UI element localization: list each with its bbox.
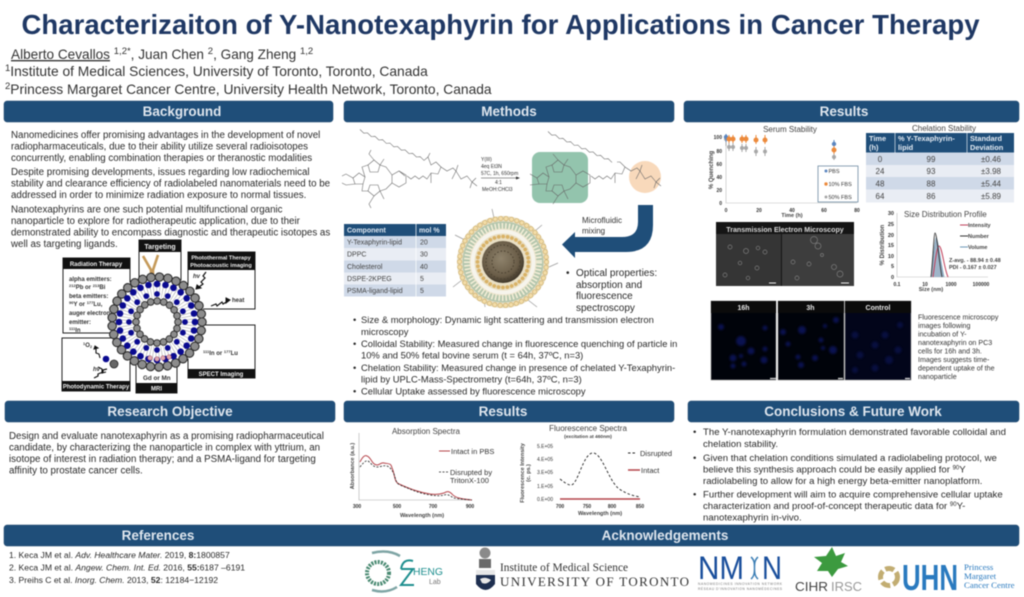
logo: NMIN: RÉSEAU D'INNOVATION NANOMÉDECINES [698,586,783,591]
box: radiation therapy: beta emitters: [69,294,108,300]
conclusions list: characterization and proof-of-concept therapeutic data for [703,501,947,512]
logo: NMIN: NM [698,550,744,586]
methods bullet list: Colloidal Stability: Measured change in fluorescence quenching of particle in [361,338,677,349]
chart: size distribution profile: 10 [888,254,894,260]
chart: fluorescence spectra: Fluorescence Spectra [549,424,627,433]
logo: University of Toronto [476,548,689,590]
logo: UHN Princess Margaret: Cancer Centre [964,580,1015,590]
heading: references and acknowledgements bar: Acknowledgements [602,528,728,543]
title: Characterizaiton of Y-Nanotexaphyrin for Applications in Cancer Therapy [22,9,980,40]
box: targeting: Targeting [144,244,176,251]
logo: University of Toronto: UNIVERSITY OF TORONTO [500,574,689,589]
image: transmission electron microscopy: Transmission Electron Microscopy [726,226,844,234]
chart: fluorescence spectra: Fluorescence Intensity [520,442,526,503]
box: radiation therapy: alpha emitters: [69,277,112,283]
image: fluorescence microscopy panels: Control [866,305,890,312]
optical properties bullet: Optical properties: [576,268,657,279]
heading: background [4,101,333,122]
chart: serum stability: 40 [789,208,795,214]
table: chelation stability: ±5.89 [981,192,1002,201]
references list: 2. Keca JM et al. Angew. Chem. Int. Ed. 2016, 55:6187 –6191 [9,562,245,572]
logo: Zheng Lab: HENG [413,566,443,578]
chart: fluorescence spectra: Intact [641,466,660,475]
authors: 1,2* [114,46,131,57]
box: radiation therapy [63,258,130,334]
reaction conditions: MeOH:CHCl3 [482,187,513,193]
chart: absorption spectra: TritonX-100 [450,476,489,485]
chemical structure: Y-texaphyrin lipid [530,132,661,204]
affiliations: 2 [5,81,10,92]
arrow: microfluidic mixing [562,205,653,258]
background text: radiopharmaceuticals, due to their ability utilize several radioisotopes [11,142,308,152]
image: fluorescence microscopy panels [711,301,911,380]
logo: CIHR IRSC [795,547,862,594]
label: microfluidic mixing: mixing [582,226,605,236]
table: chelation stability: 0 [878,155,883,164]
reaction conditions: 4:1 [495,180,502,186]
chart: absorption spectra: 300 [353,504,361,510]
table: chelation stability: % Y-Texaphyrin- [898,134,955,143]
box: SPECT imaging: 111 [203,349,210,354]
fluorescence microscopy caption [918,314,999,381]
chart: size distribution profile: % Distribution [880,224,886,265]
chart: size distribution profile: 25 [888,222,894,228]
table: lipid composition: mol % [419,228,440,234]
icon: head group highlight [629,161,661,193]
box: radiation therapy: auger electron [69,311,111,317]
table: chelation stability: ±0.46 [981,155,1002,164]
chart: fluorescence spectra: 750 [583,504,591,510]
table: lipid composition: Cholesterol [347,264,383,271]
diagram: multifunctional nanotexaphyrin [62,240,255,393]
heading: conclusions [688,401,1019,422]
chart: serum stability: 60 [821,208,827,214]
box: photothermal: heat [232,298,244,304]
chart: fluorescence spectra: (excitation at 460nm) [564,434,612,440]
chart: size distribution profile: 100000 [973,282,990,288]
box: SPECT imaging [188,325,255,378]
conclusions list: Y- [957,501,965,512]
table: lipid composition: DPPC [347,252,366,258]
authors: 2 [208,46,213,57]
chart: size distribution profile: 0 [891,275,894,281]
methods bullet list: • [353,386,356,396]
box: photodynamic therapy: Photodynamic Therapy [63,384,130,390]
chart: serum stability: 20 [756,208,762,214]
table: chelation stability: (h) [869,143,879,152]
chart: size distribution profile [880,210,1001,293]
nanoparticle illustration [453,209,558,308]
chart: fluorescence spectra: 5.E+05 [537,444,553,450]
box: SPECT imaging: 177 [224,349,231,354]
table: chelation stability: 24 [876,167,885,176]
research objective text: isotope of interest in radiation therapy; and a PSMA-ligand for targeting [9,454,316,465]
chart: serum stability [709,125,860,219]
box: MRI: Gd or Mn [143,375,171,382]
conclusions list: • [693,427,696,438]
background text: Despite promising developments, issues regarding low radiochemical [11,167,310,178]
authors: Alberto Cevallos [11,47,110,62]
table: chelation stability: 99 [927,155,936,164]
authors: 1,2 [300,46,313,57]
table: lipid composition: DSPE-2KPEG [347,276,392,283]
chart: absorption spectra: 700 [429,504,437,510]
conclusions list: • [693,490,696,500]
logo: CIHR IRSC: CIHR [795,579,828,594]
chart: size distribution profile: PDI - 0.167 ± 0.027 [949,265,997,271]
methods bullet list: • [353,362,356,373]
box: photothermal: Photoacoustic imaging [190,263,252,269]
chart: size distribution profile: Volume [968,245,987,251]
conclusions list: radiolabeling to allow for a high energy beta-emitter nanoplatform. [703,476,982,487]
box: radiation therapy: emitter: [69,320,91,326]
background text: addressed in order to minimize radiation exposure to normal tissues. [11,190,306,201]
methods bullet list: • [353,338,356,349]
chart: serum stability: 100 [714,135,722,141]
chart: size distribution profile: 10 [922,282,928,288]
image: fluorescence microscopy panels: 3h [806,305,815,312]
logo: NMIN: N [762,550,782,586]
reaction conditions: 57C, 1h, 650rpm [481,171,518,177]
methods bullet list: microscopy [361,326,409,337]
chemical structure: texaphyrin lipid [342,130,477,208]
logo: UHN Princess Margaret [880,557,1015,597]
conclusions list: Further development will aim to acquire comprehensive cellular uptake [703,490,1003,500]
affiliations: Institute of Medical Sciences, University of Toronto, Toronto, Canada [10,64,428,79]
table: lipid composition: PSMA-ligand-lipid [347,288,403,295]
background text: Nanomedicines offer promising advantages in the development of novel [11,130,320,141]
table: lipid composition: 30 [420,252,428,258]
table: chelation stability [866,124,1014,202]
reaction conditions: Y(III) [481,157,492,163]
fluorescence microscopy caption: Fluorescence microscopy [918,314,999,322]
conclusions list: 90 [950,502,957,508]
table: chelation stability: lipid [898,143,914,152]
references list: 1. Keca JM et al. Adv. Healthcare Mater. 2019, 8:1800857 [9,550,230,560]
optical properties bullet [566,268,657,314]
chart: absorption spectra: Intact in PBS [451,447,494,456]
methods bullet list: Chelation Stability: Measured change in presence of chelated Y-Texaphyrin- [361,362,675,373]
heading: references and acknowledgements bar [4,525,1019,546]
image: fluorescence microscopy panels: 16h [737,305,750,312]
chart: absorption spectra: 500 [393,504,401,510]
table: chelation stability: Deviation [970,143,1004,152]
box: photodynamic therapy [62,338,130,391]
table: chelation stability: Chelation Stability [912,124,976,133]
box: photodynamic therapy: O [85,343,90,349]
logo: UHN Princess Margaret: Princess [964,562,994,572]
reaction conditions: 4eq Et3N [481,164,502,170]
chart: fluorescence spectra: 850 [636,504,644,510]
authors: , Juan Chen [131,47,208,62]
chart: absorption spectra: Absorbance (a.u.) [350,443,356,489]
label: microfluidic mixing: Microfluidic [582,216,622,225]
chart: serum stability: % Quenching [709,151,715,189]
chart: absorption spectra: Wavelength (nm) [400,513,444,519]
chart: fluorescence spectra: Wavelength (nm) [578,511,622,517]
conclusions list: nanotexaphyrin in-vivo. [703,512,802,524]
research objective text: affinity to prostate cancer cells. [9,466,143,476]
box: radiation therapy: 213 [93,283,100,288]
methods bullet list [353,314,677,396]
background text: concurrently, enabling combination therapies or theranostic modalities [11,153,312,164]
heading: references and acknowledgements bar: References [122,528,194,543]
heading: conclusions: Conclusions & Future Work [764,404,942,419]
methods bullet list: 10% and 50% fetal bovine serum (t = 64h, 37ºC, n=3) [361,350,583,360]
heading: research objective [5,401,335,422]
logo: University of Toronto: Institute of Medical Science [500,562,628,574]
fluorescence microscopy caption: dependent uptake of the [918,364,995,372]
research objective text: Design and evaluate nanotexaphyrin as a promising radiopharmaceutical [9,431,324,442]
references list [9,550,245,585]
chart: serum stability: 20 [716,188,722,194]
logo: Zheng Lab: Lab [429,579,441,586]
conclusions list: Given that chelation conditions simulated a radiolabeling protocol, we [703,453,997,464]
heading: results top: Results [820,104,868,119]
background text: Nanotexaphyrins are one such potential multifunctional organic [11,204,283,216]
chart: serum stability: Time (h) [781,213,803,219]
logo: CIHR IRSC: IRSC [831,579,862,594]
conclusions list: Y [959,464,966,476]
table: chelation stability: 64 [876,192,885,201]
research objective text: candidate, by characterizing the nanoparticle in complex with yttrium, an [9,442,320,454]
background text [10,130,330,250]
fluorescence microscopy caption: nanoparticle [918,373,957,381]
methods bullet list: lipid by UPLC-Mass-Spectrometry (t=64h, 37ºC, n=3) [361,374,582,384]
table: chelation stability: 88 [927,180,936,188]
chart: serum stability: 80 [854,208,860,214]
chart: absorption spectra: Disrupted by [450,468,492,477]
legend: serum stability: 10% FBS [828,182,852,188]
table: chelation stability: 48 [876,180,885,188]
fluorescence microscopy caption: Images suggests time- [918,356,990,364]
chart: absorption spectra: 900 [466,504,474,510]
box: photodynamic therapy: 1 [83,341,86,346]
box: SPECT imaging: In or [209,351,224,357]
box: photodynamic therapy: 2 [90,344,93,349]
background text: demonstrated ability to encompass diagnostic and therapeutic isotopes as [11,228,330,238]
methods bullet list: Cellular Uptake assessed by fluorescence microscopy [361,386,586,396]
box: MRI [136,360,177,393]
logo: NMIN: NANOMEDICINES INNOVATION NETWORK [698,582,783,586]
box: radiation therapy: Pb or [76,285,93,291]
chart: size distribution profile: Size Distribution Profile [904,210,987,219]
heading: results bottom [344,401,674,422]
chart: serum stability: 40 [716,175,722,181]
table: lipid composition [344,224,446,296]
chart: size distribution profile: Intensity [968,223,992,229]
box: radiation therapy: 212 [69,283,76,288]
table: chelation stability: ±3.98 [981,167,1002,176]
box: radiation therapy: Radiation Therapy [70,262,123,268]
fluorescence microscopy caption: images following [918,322,970,330]
affiliations: 1 [5,63,10,74]
table: chelation stability: Time [869,134,886,143]
conclusions list [693,427,1006,524]
chart: serum stability: 0 [725,208,728,214]
table: lipid composition: 5 [420,276,424,283]
box: targeting [139,240,181,290]
chart: size distribution profile: 0.1 [894,282,901,288]
chart: fluorescence spectra: 1.E+05 [537,484,553,490]
chart: fluorescence spectra: 4.E+05 [537,457,553,463]
conclusions list: 90 [953,466,960,472]
box: radiation therapy: 90 [69,300,74,305]
table: chelation stability: 86 [927,192,936,201]
conclusions list: chelation stability. [703,439,778,450]
chart: size distribution profile: 30 [888,211,894,217]
box: SPECT imaging: SPECT Imaging [199,372,244,378]
heading: results top [684,101,1019,122]
chart: fluorescence spectra: 800 [608,504,616,510]
logo: UHN Princess Margaret: UHN [902,557,958,597]
chart: serum stability: 80 [716,149,722,155]
optical properties bullet: spectroscopy [576,303,635,314]
chart: fluorescence spectra [520,424,672,517]
heading: results bottom: Results [479,404,527,419]
legend: serum stability: PBS [828,169,840,175]
heading: research objective: Research Objective [107,404,233,419]
affiliations [5,63,492,97]
research objective text [9,431,324,476]
box: radiation therapy: 177 [87,300,94,305]
fluorescence microscopy caption: cells for 16h and 3h. [918,348,982,356]
chart: size distribution profile: 15 [888,243,894,249]
chart: absorption spectra [350,427,494,519]
box: photothermal: hv [193,274,201,280]
label: microfluidic mixing [582,216,622,236]
table: lipid composition: Component [347,228,387,234]
conclusions list: believe this synthesis approach could be easily applied for [703,464,950,476]
box: MRI: MRI [151,386,162,392]
background text: stability and clearance efficiency of radiolabeled nanomaterials need to be [11,178,330,190]
background text: nanoparticle to explore for radiotherapeutic application, due to their [11,216,301,227]
table: lipid composition: Y-Texaphyrin-lipid [347,240,402,246]
box: radiation therapy: Y or [73,302,87,308]
chart: serum stability: Serum Stability [763,125,817,134]
chart: serum stability: 60 [716,162,722,168]
chart: fluorescence spectra: 700 [556,504,564,510]
methods bullet list: Size & morphology: Dynamic light scattering and transmission electron [361,314,654,325]
box: radiation therapy: In [75,328,81,334]
heading: methods: Methods [481,104,537,119]
nanoparticle cross-section [109,274,205,370]
fluorescence microscopy caption: nanotexaphyrin on PC3 [918,339,992,347]
image: transmission electron microscopy [716,222,854,286]
legend: serum stability [818,166,858,202]
conclusions list: • [693,453,696,464]
box: photodynamic therapy: hv [93,367,101,373]
chart: size distribution profile: 20 [888,233,894,239]
chart: size distribution profile: 5 [891,264,894,270]
table: chelation stability: 93 [927,167,936,176]
box: photothermal: Photothermal Therapy [191,256,252,262]
optical properties bullet: • [566,268,570,279]
chart: size distribution profile: Z-avg. - 88.94 ± 0.48 [949,258,1001,264]
box: radiation therapy: Bi [99,285,106,291]
logo: NMIN [698,550,783,591]
table: chelation stability: ±5.44 [981,180,1002,188]
table: chelation stability: Standard [970,134,1003,143]
reaction conditions [481,157,520,193]
logo: UHN Princess Margaret: Margaret [964,571,997,581]
chart: size distribution profile: Size (nm) [919,287,943,293]
conclusions list: The Y-nanotexaphyrin formulation demonstrated favorable colloidal and [703,427,1006,438]
optical properties bullet: fluorescence [576,291,633,302]
box: radiation therapy: Lu, [93,302,103,308]
table: lipid composition: 5 [420,288,424,295]
background text: well as targeting ligands. [10,239,118,250]
authors: , Gang Zheng [213,47,300,62]
optical properties bullet: absorption and [576,280,642,291]
affiliations: Princess Margaret Cancer Centre, University Health Network, Toronto, Canada [10,82,492,97]
heading: background: Background [143,104,221,119]
box: radiation therapy: 111 [69,326,76,331]
legend: serum stability: 50% FBS [828,195,852,201]
heading: methods [344,101,674,122]
table: lipid composition: 40 [420,264,428,271]
logo: Zheng Lab [367,552,443,591]
chart: absorption spectra: Absorption Spectra [392,427,461,436]
table: lipid composition: 20 [420,240,428,246]
references list: 3. Preihs C et al. Inorg. Chem. 2013, 52: 12184−12192 [9,575,218,585]
chart: serum stability: 0 [719,201,722,207]
chart: fluorescence spectra: 3.E+05 [537,470,553,476]
box: SPECT imaging: Lu [231,351,238,357]
chart: size distribution profile: 1000 [945,282,957,288]
methods bullet list: • [353,314,356,325]
icon: metal core highlight [532,152,588,203]
chart: fluorescence spectra: Disrupted [640,449,672,458]
chart: fluorescence spectra: (c. ps.) [526,464,532,482]
chart: fluorescence spectra: 0.E+00 [537,497,553,503]
fluorescence microscopy caption: incubation of Y- [918,330,967,338]
box: photothermal [188,252,255,309]
chart: size distribution profile: Number [968,234,990,240]
